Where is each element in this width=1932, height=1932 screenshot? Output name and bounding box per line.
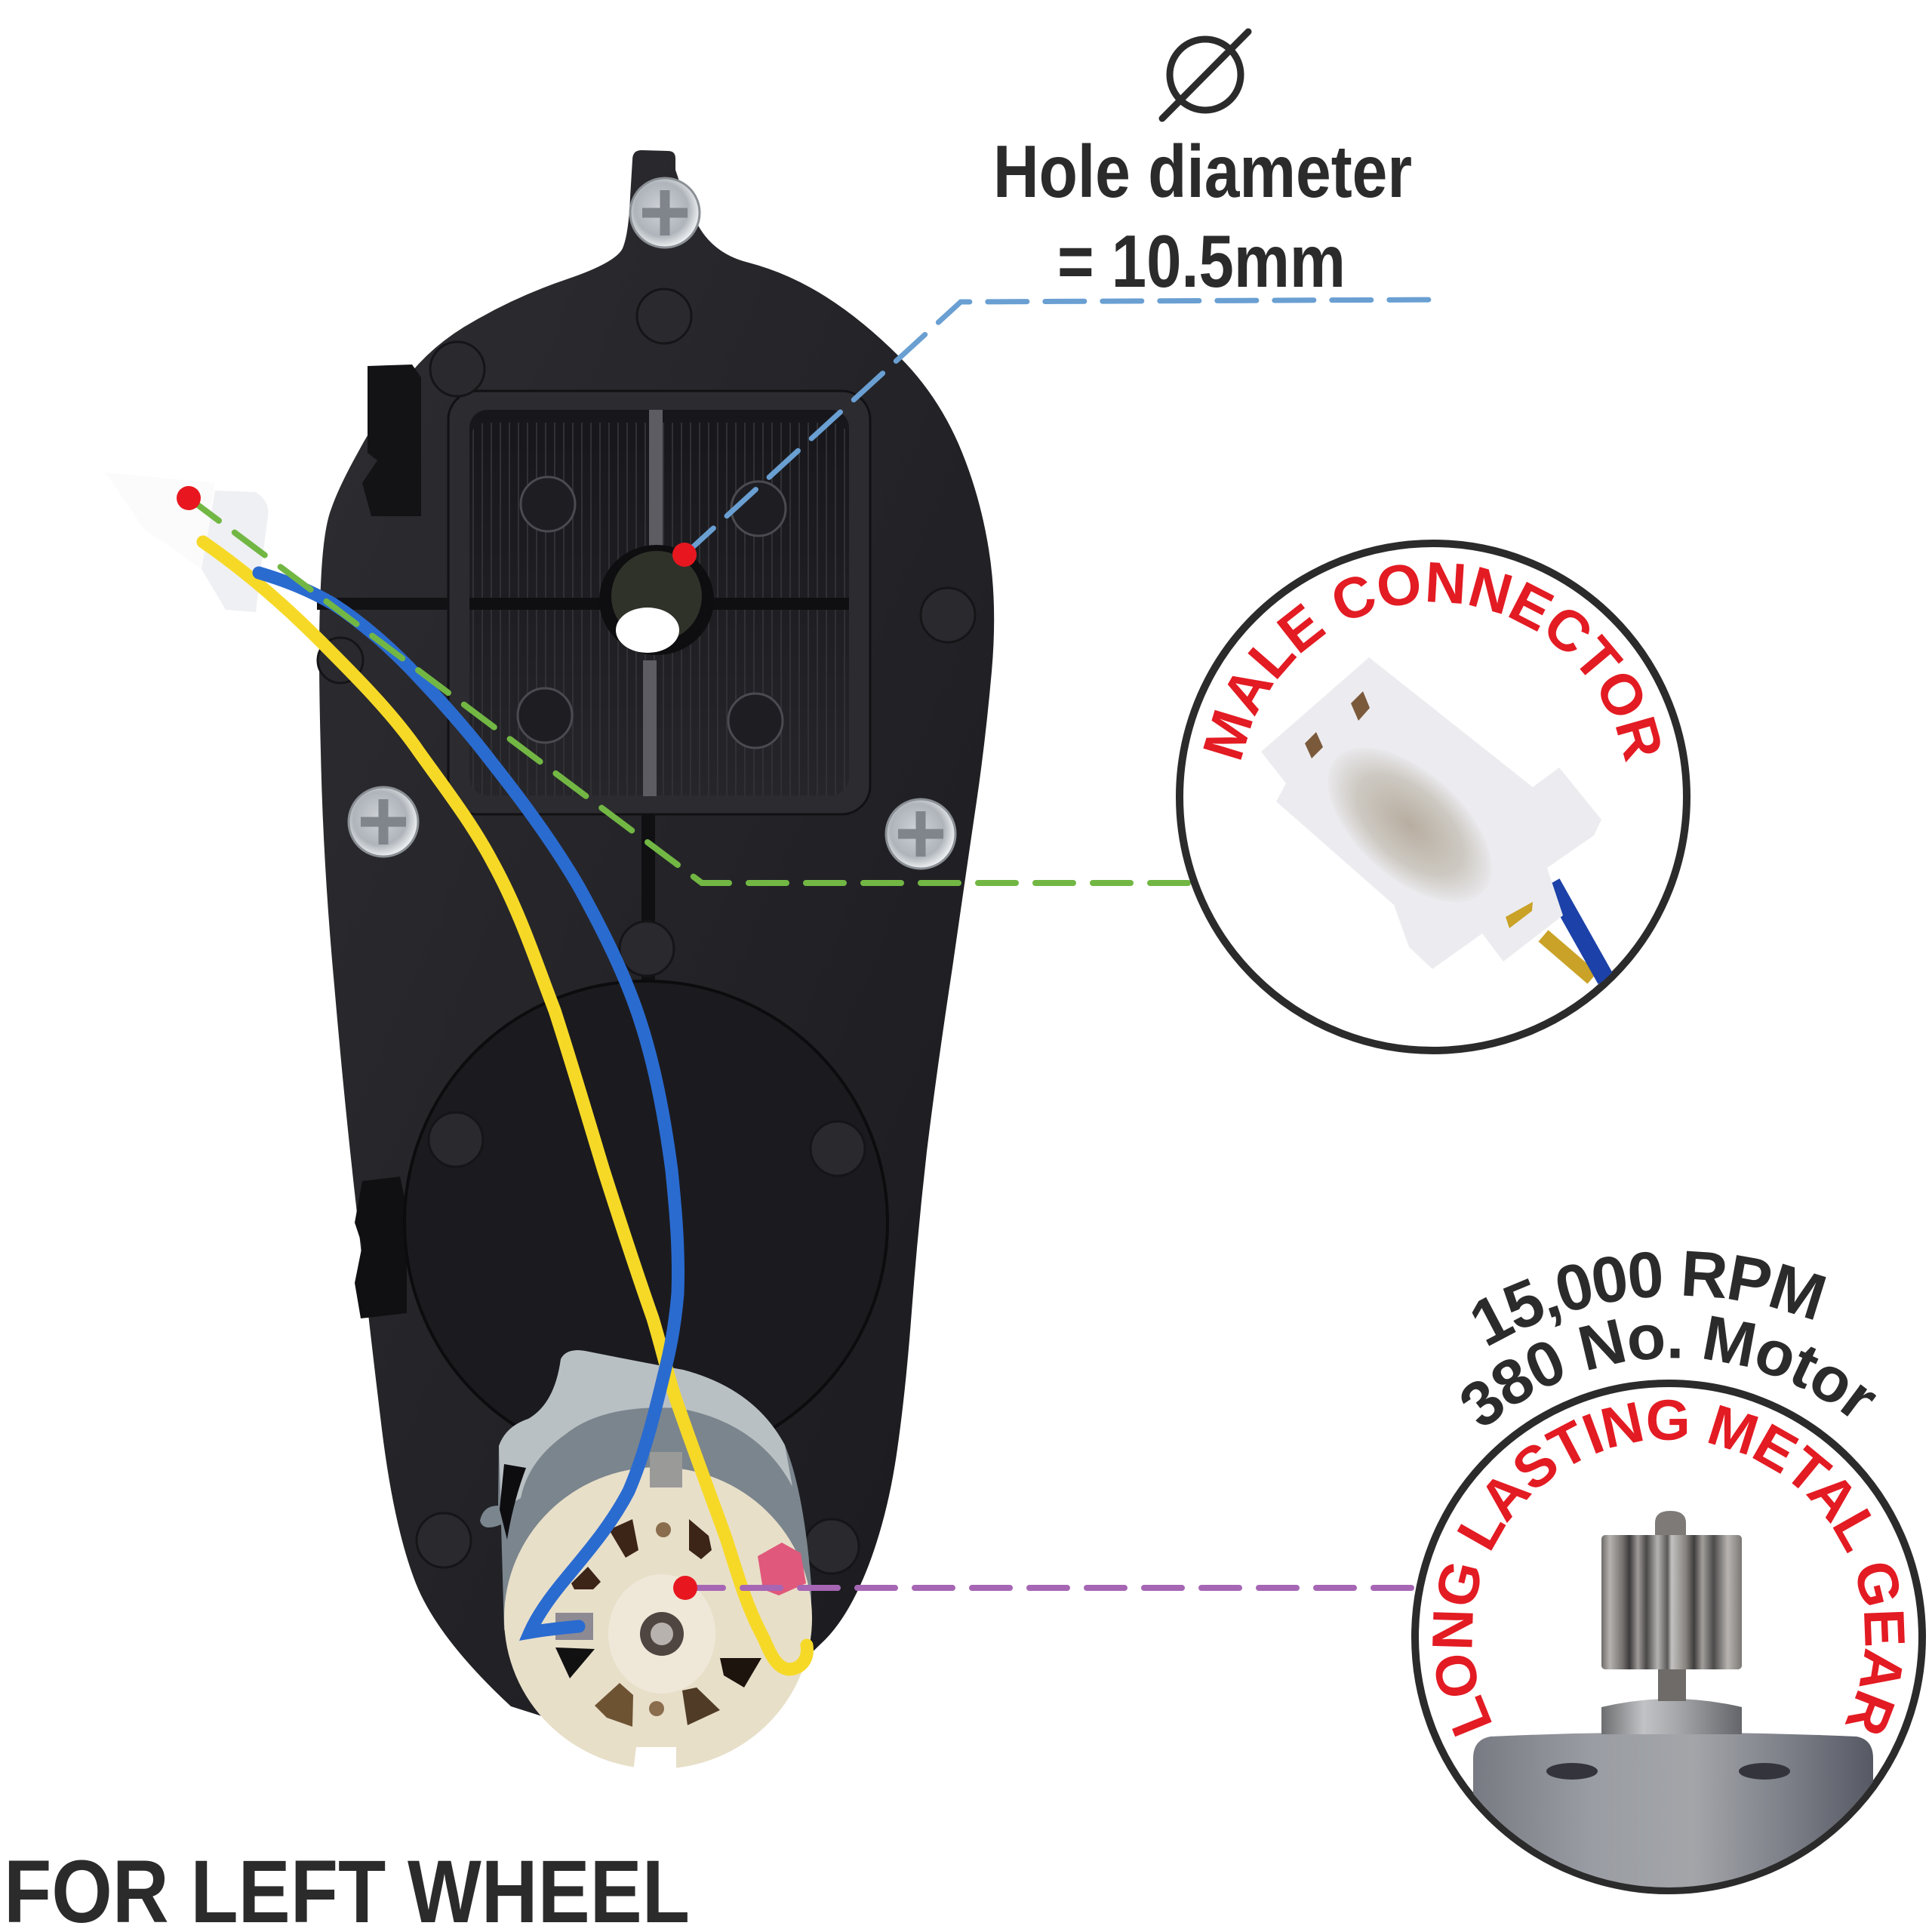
- leader line: metal gear: [685, 1585, 1419, 1591]
- gear photo: [1473, 1511, 1873, 1902]
- curved label: male connector: MALE CONNECTOR: [1203, 562, 1660, 762]
- gearbox product photo: [106, 150, 994, 1771]
- leader line: male connector: [189, 498, 1195, 883]
- shaft: [640, 1612, 684, 1656]
- boss: [1601, 1699, 1742, 1734]
- curved label: 380 No. Motor: 380 No. Motor: [1461, 1316, 1876, 1425]
- connector body: [1261, 657, 1601, 969]
- motor can: [480, 1350, 811, 1630]
- motor end body: [1473, 1733, 1873, 1902]
- dark gap: [500, 1464, 526, 1540]
- connector stain: [1330, 749, 1490, 900]
- blue wire: [259, 573, 678, 1632]
- lower side clip: [355, 1177, 407, 1318]
- housing body: [319, 150, 994, 1736]
- motor face: [504, 1467, 812, 1769]
- terminal left: [555, 1613, 593, 1640]
- shaft: [1658, 1669, 1686, 1701]
- square recess: [317, 391, 870, 814]
- red marker dots: [177, 486, 697, 1600]
- clip window: [1506, 902, 1533, 928]
- small face holes: [649, 1522, 671, 1716]
- diameter symbol: [1162, 32, 1248, 118]
- screw left: [349, 787, 418, 857]
- pin: [1655, 1511, 1686, 1535]
- screw top: [630, 178, 700, 248]
- recess bosses: [518, 477, 786, 748]
- housing bosses: [318, 289, 975, 1574]
- connector photo: [1261, 657, 1606, 980]
- pink mark: [758, 1543, 806, 1595]
- glue band: [499, 1350, 792, 1509]
- leader line: hole diameter: [685, 300, 1441, 555]
- callout circle: metal gear: [1411, 1380, 1926, 1894]
- lower rib: [641, 814, 655, 995]
- curved label: 15,000 RPM: 15,000 RPM: [1472, 1251, 1826, 1346]
- upper side clip: [362, 365, 421, 516]
- large round cover: [405, 981, 888, 1464]
- value: 10.5mm: = 10.5mm: [1057, 220, 1346, 303]
- wires: [1543, 936, 1592, 978]
- horizontal rib: [469, 598, 849, 610]
- motor: [480, 1350, 812, 1771]
- gear: [1601, 1535, 1742, 1669]
- motor hub: [608, 1574, 715, 1694]
- white connector on wire end: [106, 472, 268, 612]
- face notch: [633, 1747, 676, 1771]
- pin holes: [1305, 691, 1370, 758]
- screw right: [886, 799, 955, 869]
- yellow wire: [203, 542, 807, 1669]
- heading: hole diameter: Hole diameter: [993, 130, 1412, 213]
- vertical rib: [643, 410, 663, 796]
- callout circle: male connector: [1176, 540, 1690, 1054]
- motor slots: [555, 1519, 761, 1727]
- body slots: [1546, 1763, 1790, 1780]
- curved label: long lasting metal gear: LONG LASTING METAL GEAR: [1432, 1399, 1905, 1737]
- central hole: [599, 545, 714, 655]
- terminal top: [650, 1452, 682, 1487]
